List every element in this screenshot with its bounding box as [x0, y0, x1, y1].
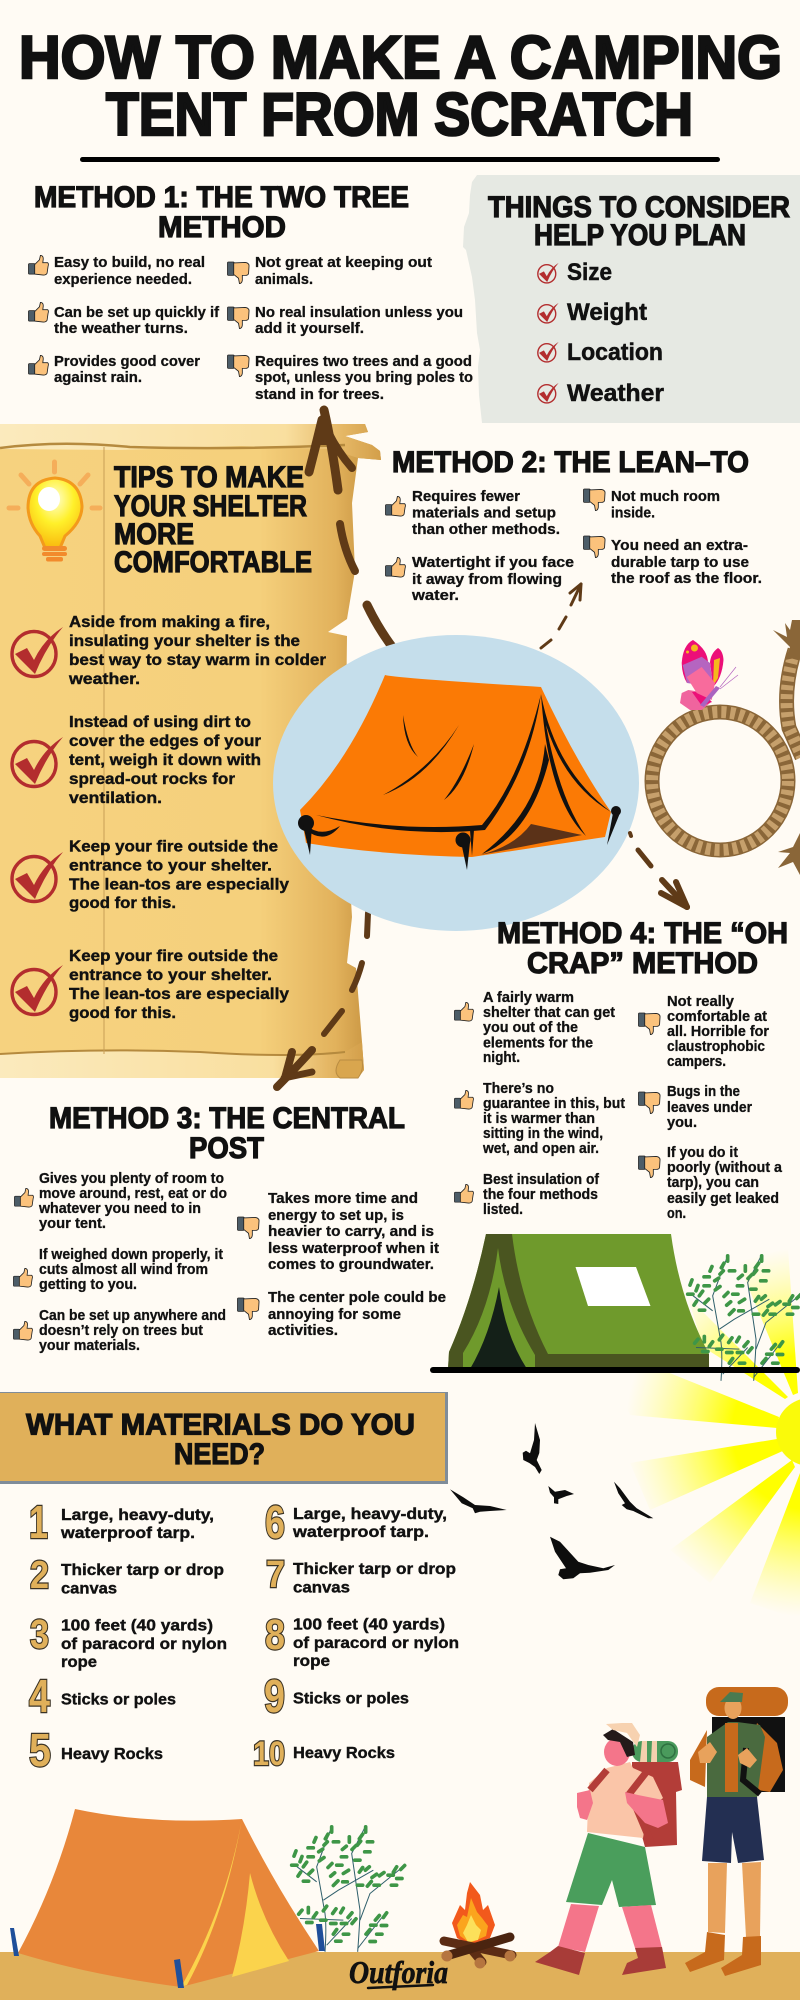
logo: Outforia: Outforia — [349, 1954, 448, 1990]
panel: method 4: sitting in the wind, — [483, 1126, 603, 1142]
tip 1: best way to stay warm in colder — [69, 652, 326, 669]
tips heading: YOUR SHELTER — [114, 490, 307, 523]
panel: method 1: METHOD 1: THE TWO TREE — [34, 181, 409, 214]
rope illustration — [652, 620, 800, 875]
tip 3: good for this. — [69, 895, 176, 912]
panel: method 2: it away from flowing — [412, 572, 562, 588]
panel: method 4: Not really — [667, 994, 734, 1010]
materials list column 2: 7 — [266, 1554, 285, 1596]
panel: method 3: annoying for some — [268, 1307, 401, 1323]
panel: method 2: materials and setup — [412, 506, 556, 522]
tent illustration on blue ellipse — [273, 635, 639, 931]
scroll parchment shape — [0, 424, 381, 1078]
materials list column 1: rope — [61, 1654, 97, 1671]
panel: method 2: You need an extra- — [611, 538, 748, 554]
panel: method 4: campers. — [667, 1054, 726, 1070]
panel: method 3: energy to set up, is — [268, 1208, 404, 1224]
panel: parchment scroll with tips — [0, 424, 381, 1078]
materials list column 1 — [29, 1496, 227, 1776]
materials list column 2: 6 — [265, 1496, 285, 1548]
arrow: to method 2 — [541, 584, 581, 648]
icon: light bulb — [9, 462, 100, 562]
orange tent bottom — [10, 1809, 325, 1988]
panel: method 2: inside. — [611, 506, 655, 522]
panel: method 4: Best insulation of — [483, 1172, 599, 1188]
panel: method 3: getting to you. — [39, 1277, 137, 1293]
panel: method 3: Takes more time and — [268, 1191, 418, 1207]
panel: method 1: experience needed. — [54, 272, 192, 288]
panel: method 1: Requires two trees and a good — [255, 354, 472, 370]
tip 3: Keep your fire outside the — [69, 838, 278, 856]
hiker 1 — [535, 1723, 682, 1975]
panel: what materials heading: WHAT MATERIALS DO YOU — [26, 1408, 415, 1442]
panel: method 4: METHOD 4: THE “OH — [497, 917, 788, 950]
materials list column 1: Heavy Rocks — [61, 1746, 163, 1763]
hiker 2 — [685, 1687, 788, 1976]
panel: things to consider — [463, 175, 800, 423]
tip 4 — [12, 948, 289, 1022]
panel: method 4: CRAP” METHOD — [527, 947, 758, 980]
materials list column 1: Sticks or poles — [61, 1692, 176, 1708]
blue ellipse — [273, 635, 639, 931]
ground line — [430, 1367, 800, 1373]
materials list column 1: 5 — [29, 1724, 51, 1776]
materials list column 2: Heavy Rocks — [293, 1745, 395, 1762]
panel: method 3: POST — [189, 1132, 264, 1165]
panel: method 1: animals. — [255, 272, 313, 288]
panel: method 3: activities. — [268, 1323, 338, 1339]
materials list column 1: 100 feet (40 yards) — [61, 1618, 213, 1634]
panel: method 2: Watertight if you face — [412, 555, 574, 571]
materials list column 1: 2 — [30, 1554, 49, 1597]
campfire — [442, 1882, 516, 1968]
materials list column 1: waterproof tarp. — [60, 1525, 195, 1542]
panel: method 2: METHOD 2: THE LEAN–TO — [392, 446, 749, 479]
materials list column 1: canvas — [61, 1580, 117, 1598]
title — [19, 24, 782, 148]
panel: method 1: Provides good cover — [54, 354, 200, 370]
materials list column 2: Sticks or poles — [293, 1690, 409, 1708]
tips heading: MORE — [114, 518, 194, 551]
panel: method 3 — [13, 1102, 446, 1354]
materials list column 2: 10 — [253, 1735, 285, 1773]
tip 2: tent, weigh it down with — [69, 752, 261, 769]
materials list column 2: Large, heavy-duty, — [293, 1506, 447, 1523]
tip 2 — [12, 714, 261, 807]
materials list column 2: 8 — [265, 1611, 285, 1659]
materials list column 1: 3 — [30, 1611, 49, 1657]
panel: method 1: Easy to build, no real — [54, 255, 205, 271]
panel: method 1: add it yourself. — [255, 321, 364, 337]
panel: things to consider: Size — [567, 259, 612, 286]
panel: method 4: you. — [667, 1115, 697, 1131]
panel: method 1: against rain. — [54, 370, 142, 386]
tips heading: TIPS TO MAKE — [114, 461, 304, 494]
panel: method 4 — [454, 917, 788, 1222]
green tent — [448, 1234, 709, 1369]
panel: method 4: Bugs in the — [667, 1084, 740, 1100]
panel: method 1: No real insulation unless you — [255, 305, 463, 321]
panel: method 1: spot, unless you bring poles to — [255, 370, 473, 386]
panel: method 4: easily get leaked — [667, 1191, 779, 1207]
orange tent — [298, 675, 621, 870]
panel: method 1: Can be set up quickly if — [54, 305, 219, 321]
panel: method 4: There’s no — [483, 1081, 554, 1097]
tip 3: entrance to your shelter. — [69, 858, 272, 874]
panel: method 3: heavier to carry, and is — [268, 1224, 434, 1240]
tip 4: good for this. — [69, 1005, 176, 1022]
panel: method 1 — [28, 181, 473, 403]
tip 4: entrance to your shelter. — [69, 967, 272, 984]
tip 1: weather. — [68, 671, 140, 688]
panel: method 2: Not much room — [611, 489, 720, 505]
panel: what materials heading: NEED? — [174, 1438, 265, 1471]
panel: method 2: the roof as the floor. — [611, 571, 762, 587]
panel: method 4: on. — [667, 1206, 686, 1222]
panel: method 4: the four methods — [483, 1187, 598, 1203]
title: HOW TO MAKE A CAMPING — [19, 24, 782, 91]
panel: method 4: all. Horrible for — [667, 1024, 769, 1040]
panel: method 3: your tent. — [39, 1216, 106, 1232]
materials list column 1: Large, heavy-duty, — [61, 1507, 214, 1524]
materials list column 2: 100 feet (40 yards) — [293, 1616, 445, 1634]
panel: method 4: night. — [483, 1050, 520, 1066]
panel: things to consider: Weight — [567, 299, 647, 326]
panel: method 1: stand in for trees. — [255, 387, 384, 403]
tip 2: spread-out rocks for — [69, 771, 235, 788]
panel: method 4: wet, and open air. — [482, 1141, 599, 1157]
arrow: to method 4 — [630, 833, 687, 907]
tip 4: Keep your fire outside the — [69, 948, 278, 965]
tip 1 — [12, 614, 326, 688]
materials list column 1: 4 — [29, 1670, 50, 1722]
panel: method 3: METHOD 3: THE CENTRAL — [49, 1102, 405, 1135]
panel: what materials heading — [0, 1392, 448, 1484]
panel: method 4: A fairly warm — [483, 990, 574, 1006]
panel: things to consider: Location — [567, 339, 663, 366]
panel: things to consider: HELP YOU PLAN — [534, 219, 746, 252]
panel: method 2 — [385, 446, 762, 604]
panel: method 1: Not great at keeping out — [255, 255, 432, 271]
panel: method 4: tarp), you can — [667, 1175, 759, 1191]
bottom plant — [292, 1825, 405, 1952]
panel: method 3: If weighed down properly, it — [39, 1247, 223, 1263]
materials list column 1: of paracord or nylon — [61, 1636, 227, 1653]
materials list column 2: of paracord or nylon — [293, 1635, 459, 1652]
panel: method 3: The center pole could be — [268, 1290, 446, 1306]
panel: method 4: leaves under — [667, 1100, 752, 1116]
materials list column 1: 1 — [29, 1496, 48, 1548]
materials list column 2: 9 — [264, 1670, 285, 1722]
tip 3 — [12, 838, 289, 912]
panel: method 4: If you do it — [667, 1145, 738, 1161]
ground — [0, 1952, 800, 2000]
panel: method 4: poorly (without a — [667, 1160, 783, 1176]
tip 1: insulating your shelter is the — [69, 633, 300, 650]
panel: method 1: METHOD — [158, 211, 286, 244]
tip 2: Instead of using dirt to — [69, 714, 251, 731]
plant beside green tent — [688, 1254, 800, 1381]
tip 2: ventilation. — [69, 790, 162, 807]
materials list column 2 — [253, 1496, 459, 1773]
tip 3: The lean-tos are especially — [69, 876, 289, 894]
panel: things to consider: Weather — [567, 380, 664, 407]
panel: method 4: claustrophobic — [667, 1039, 765, 1055]
panel: method 4: comfortable at — [667, 1009, 767, 1025]
tip 4: The lean-tos are especially — [69, 986, 289, 1003]
panel: method 4: you out of the — [483, 1020, 578, 1036]
materials list column 2: Thicker tarp or drop — [293, 1561, 456, 1578]
panel: method 2: Requires fewer — [412, 489, 520, 505]
panel: method 3: Can be set up anywhere and — [39, 1308, 226, 1324]
tips heading: COMFORTABLE — [114, 546, 312, 579]
sun — [600, 1248, 800, 1620]
tip 2: cover the edges of your — [69, 733, 261, 750]
panel: method 3: your materials. — [39, 1338, 140, 1354]
panel: method 1: the weather turns. — [54, 321, 188, 337]
materials list column 2: canvas — [293, 1580, 350, 1596]
materials list column 1: Thicker tarp or drop — [61, 1562, 224, 1579]
tip 1: Aside from making a fire, — [69, 614, 270, 631]
panel: method 4: listed. — [483, 1202, 523, 1218]
panel: method 4: it is warmer than — [483, 1111, 595, 1127]
title: TENT FROM SCRATCH — [106, 81, 693, 148]
panel: method 2: than other methods. — [412, 522, 560, 538]
materials list column 2: rope — [293, 1653, 330, 1670]
panel: method 2: water. — [411, 588, 459, 604]
panel: method 3: comes to groundwater. — [268, 1257, 434, 1273]
tips heading — [114, 461, 312, 579]
arrow: to method 3 — [277, 913, 368, 1087]
arrow: to method 1 — [309, 407, 393, 648]
panel: method 3: whatever you need to in — [38, 1201, 201, 1217]
panel: method 4: shelter that can get — [483, 1005, 615, 1021]
panel: method 3: move around, rest, eat or do — [39, 1186, 227, 1202]
icon: butterfly — [680, 640, 738, 710]
panel: method 3: doesn’t rely on trees but — [39, 1323, 203, 1339]
panel: method 3: cuts almost all wind from — [39, 1262, 208, 1278]
birds — [450, 1423, 653, 1579]
panel: method 3: Gives you plenty of room to — [39, 1171, 224, 1187]
panel: method 4: elements for the — [483, 1036, 593, 1052]
panel: method 4: guarantee in this, but — [483, 1096, 625, 1112]
panel: method 2: durable tarp to use — [611, 555, 749, 571]
panel: method 3: less waterproof when it — [268, 1241, 439, 1257]
materials list column 2: waterproof tarp. — [292, 1524, 429, 1541]
